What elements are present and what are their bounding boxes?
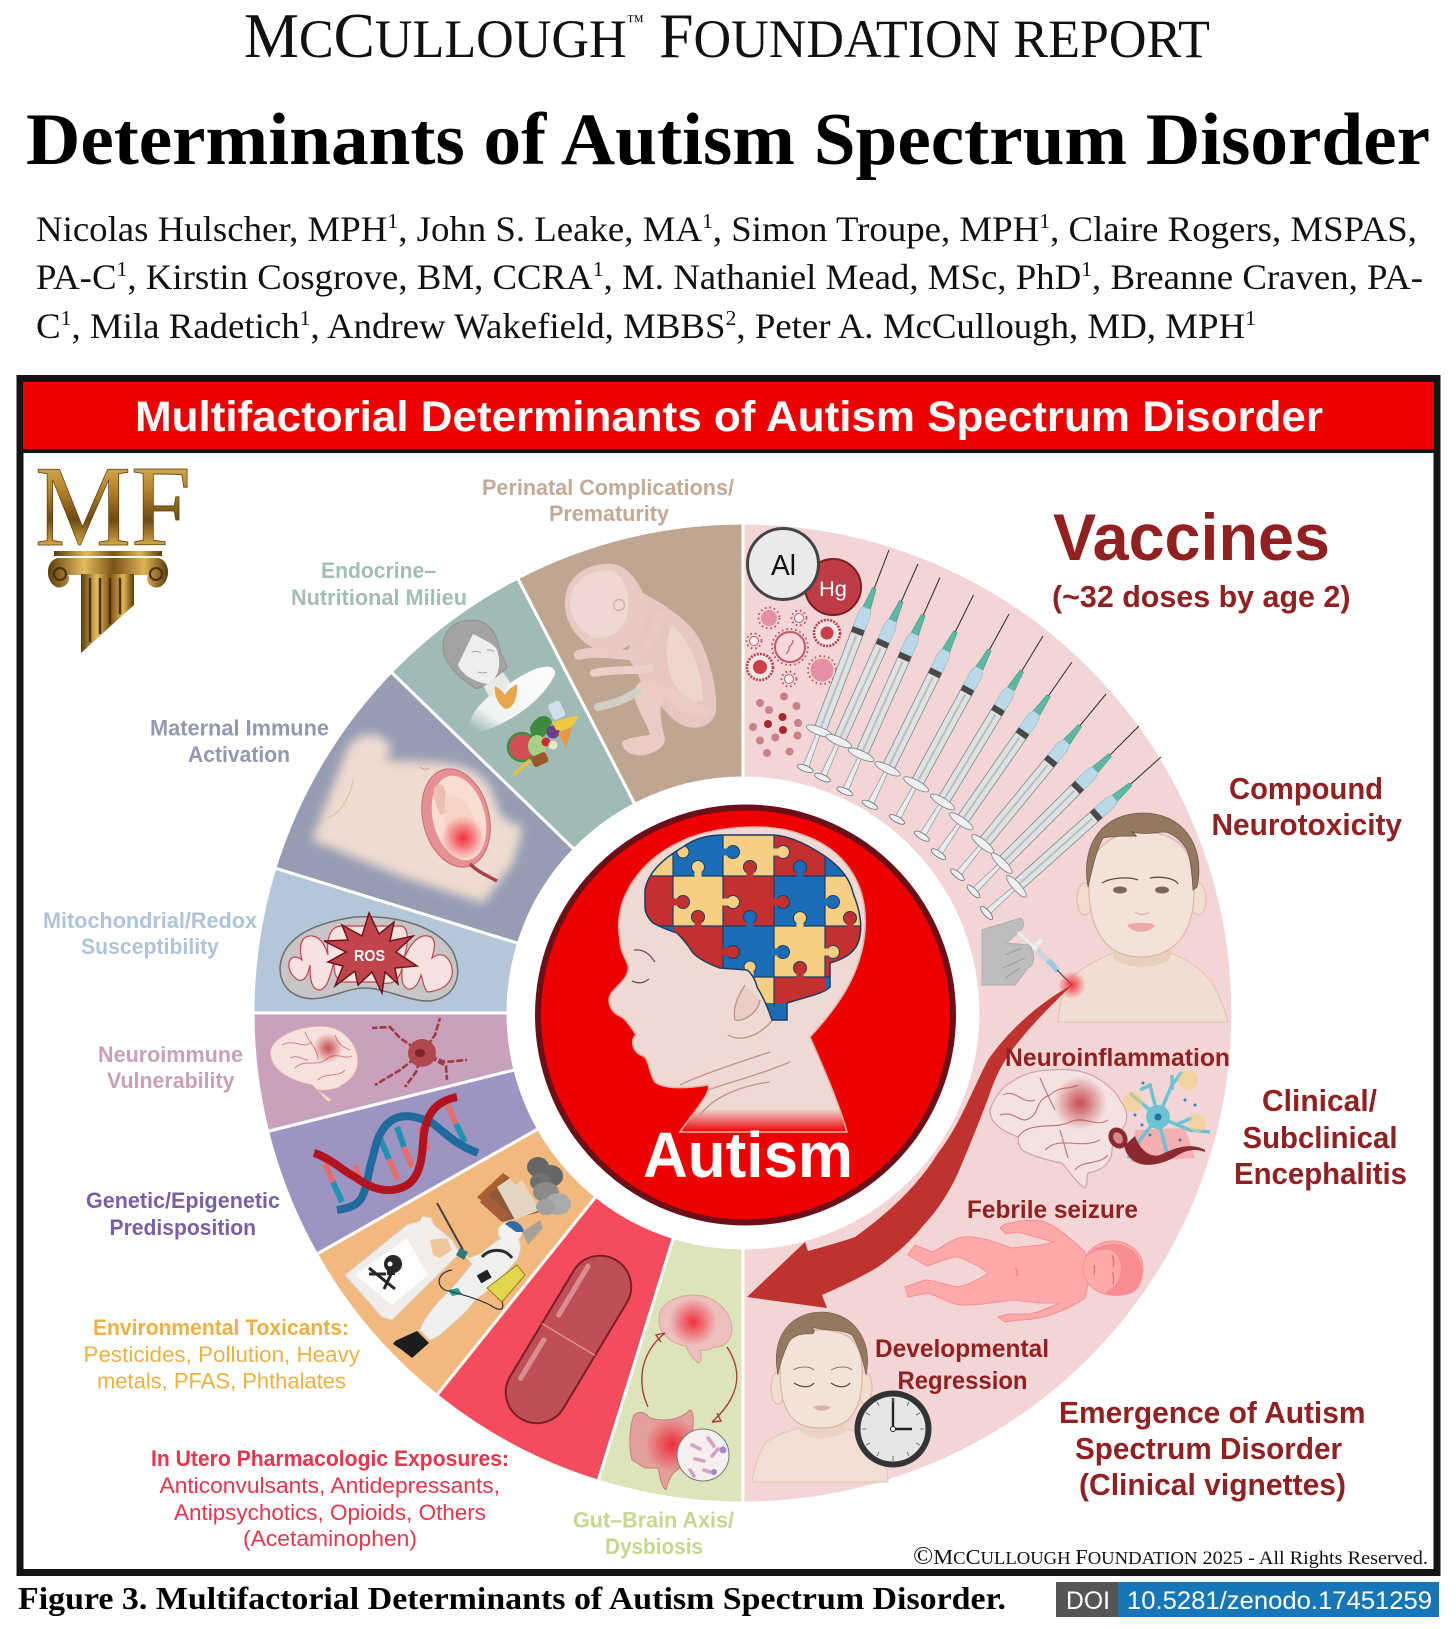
wheel of determinants	[253, 523, 1233, 1503]
heading: vaccines	[1052, 500, 1350, 614]
authors: , Breanne Craven, PA-	[1092, 257, 1423, 297]
illustration: capsule	[494, 1244, 643, 1435]
DOI badge: 10.5281/zenodo.17451259	[1127, 1587, 1432, 1615]
label: environmental toxicants: Environmental Toxicants:	[93, 1315, 349, 1340]
wedge: endocrine nutritional	[391, 578, 635, 850]
face details	[632, 950, 790, 1115]
banner heading: Multifactorial Determinants of Autism Spectrum Disorder	[135, 393, 1323, 441]
wedge: maternal immune activation	[275, 672, 574, 944]
authors: , M. Nathaniel Mead, MSc, PhD	[604, 257, 1081, 297]
illustration: febrile infant	[905, 1220, 1143, 1322]
label: emergence of autism: Emergence of Autism	[1059, 1395, 1366, 1430]
jug	[345, 1216, 460, 1320]
banner	[23, 382, 1434, 453]
label: maternal immune activation: Maternal Immune	[150, 716, 329, 740]
panel: figure frame	[20, 378, 1437, 1572]
icon: aluminium: Al	[771, 550, 796, 582]
header: McCullough Foundation Report: MCCULLOUGH	[244, 0, 636, 71]
label: developmental regression	[875, 1335, 1049, 1395]
icon: mercury	[805, 559, 861, 615]
header: McCullough Foundation Report: OUNDATION REPORT	[693, 9, 1229, 69]
DOI badge: DOI	[1066, 1587, 1110, 1615]
blood vessel	[1124, 1136, 1205, 1165]
label: clinical subclinical encephalitis: Subclinical	[1242, 1120, 1398, 1155]
label: perinatal complications	[482, 475, 734, 526]
heading: vaccines: Vaccines	[1053, 500, 1330, 574]
label: clinical subclinical encephalitis	[1234, 1083, 1407, 1191]
illustration: toxicants, sprayer and factory	[345, 1157, 571, 1358]
copyright: ©MCCULLOUGH FOUNDATION 2025 - All Rights Reserved.	[913, 1543, 1428, 1570]
backpack and hose	[482, 1250, 512, 1258]
authors: , Andrew Wakefield, MBBS	[311, 306, 726, 346]
skull and crossbones	[369, 1255, 402, 1289]
baby head silhouette	[609, 827, 865, 1132]
illustration: DNA helix	[314, 1097, 478, 1210]
label: mitochondrial redox susceptibility	[43, 908, 258, 959]
icon: clock	[858, 1394, 928, 1464]
label: genetic epigenetic predisposition	[86, 1188, 280, 1240]
label: genetic epigenetic predisposition: Genetic/Epigenetic	[86, 1188, 280, 1213]
wedge: environmental toxicants	[316, 1129, 596, 1395]
label: developmental regression: Developmental	[875, 1335, 1049, 1363]
wedge: mitochondrial redox	[253, 868, 518, 1013]
illustration: neuroinflammation brain and neuron	[990, 1070, 1210, 1188]
authors	[36, 209, 1423, 346]
label: compound neurotoxicity: Neurotoxicity	[1212, 807, 1403, 842]
header: McCullough Foundation Report: ™	[627, 11, 644, 31]
label: endocrine nutritional milieu	[291, 558, 467, 610]
illustration: woman with thyroid and food	[443, 620, 578, 775]
authors: 1	[61, 306, 71, 330]
wedge: vaccines	[743, 523, 1233, 1503]
label: in utero pharmacologic exposures: In Utero Pharmacologic Exposures:	[151, 1446, 509, 1471]
label: compound neurotoxicity	[1212, 771, 1403, 842]
spray wand	[437, 1203, 463, 1250]
puzzle knobs	[676, 846, 856, 974]
smoke	[527, 1157, 571, 1215]
illustration: gut-brain axis	[630, 1295, 737, 1490]
label: emergence of autism: Spectrum Disorder	[1075, 1431, 1342, 1466]
authors: , Claire Rogers, MSPAS,	[1050, 209, 1417, 249]
label: gut-brain axis dysbiosis: Dysbiosis	[605, 1534, 703, 1559]
logo: MF column: MF	[35, 443, 191, 571]
authors: 1	[1039, 209, 1050, 233]
label: environmental toxicants: Pesticides, Pollution, Heavy	[84, 1342, 360, 1367]
authors: 1	[300, 306, 311, 330]
icon: mercury: Hg	[819, 578, 847, 601]
authors: , John S. Leake, MA	[398, 209, 702, 249]
label: gut-brain axis dysbiosis	[573, 1508, 734, 1559]
label: endocrine nutritional milieu: Endocrine–	[321, 558, 436, 583]
wedge: perinatal complications	[518, 523, 743, 804]
food group	[508, 700, 578, 775]
illustration: gloved hand with syringe	[982, 918, 1086, 999]
worker suit	[420, 1235, 520, 1340]
label: neuroimmune vulnerability	[98, 1042, 243, 1093]
illustration: fetus	[565, 564, 716, 755]
illustration: mitochondrion with ROS	[280, 913, 458, 1001]
arrow: from injection to autism	[747, 985, 1072, 1308]
label: in utero pharmacologic exposures: Antipsychotics, Opioids, Others	[174, 1500, 486, 1525]
neuron	[1123, 1070, 1210, 1162]
illustration: pregnant abdomen	[312, 735, 523, 903]
authors: , Peter A. McCullough, MD, MPH	[736, 306, 1245, 346]
factory	[477, 1173, 510, 1203]
puzzle brain	[646, 836, 860, 1020]
label: compound neurotoxicity: Compound	[1229, 771, 1383, 806]
illustration: sleeping infant	[752, 1312, 888, 1482]
authors: PA-C	[36, 257, 114, 297]
header: McCullough Foundation Report: F	[644, 0, 693, 71]
label: gut-brain axis dysbiosis: Gut–Brain Axis/	[573, 1508, 734, 1532]
label: endocrine nutritional milieu: Nutritional Milieu	[291, 585, 467, 610]
authors: , Kirstin Cosgrove, BM, CCRA	[127, 257, 593, 297]
label: perinatal complications: Prematurity	[549, 501, 670, 526]
label: neuroinflammation: Neuroinflammation	[1005, 1044, 1230, 1072]
figure caption: Figure 3. Multifactorial Determinants of Autism Spectrum Disorder.	[18, 1580, 1006, 1616]
label: maternal immune activation: Activation	[188, 742, 290, 767]
logo: MF column	[35, 443, 191, 653]
authors: , Simon Troupe, MPH	[713, 209, 1039, 249]
label: clinical subclinical encephalitis: Encephalitis	[1234, 1156, 1407, 1191]
authors: , Mila Radetich	[71, 306, 300, 346]
authors: 1	[702, 209, 713, 233]
label: in utero pharmacologic exposures	[151, 1446, 509, 1551]
label: mitochondrial redox susceptibility: Susceptibility	[81, 934, 220, 959]
ROS burst	[324, 913, 417, 993]
illustration: inflamed brain and microglia	[270, 1018, 467, 1102]
wedge: neuroimmune	[253, 1013, 515, 1132]
syringes	[791, 545, 1170, 925]
title: Determinants of Autism Spectrum Disorder	[26, 99, 1430, 181]
illustration: smiling infant	[1058, 813, 1228, 1022]
illustration: viruses and particles	[746, 608, 840, 757]
label: emergence of autism	[1059, 1395, 1366, 1502]
label: genetic epigenetic predisposition: Predisposition	[110, 1215, 256, 1240]
label: maternal immune activation	[150, 716, 329, 767]
label: neuroimmune vulnerability: Neuroimmune	[98, 1042, 243, 1067]
label: in utero pharmacologic exposures: Anticonvulsants, Antidepressants,	[160, 1473, 500, 1498]
heading: vaccines: (~32 doses by age 2)	[1052, 579, 1350, 614]
authors: 1	[593, 257, 604, 281]
authors: Nicolas Hulscher, MPH	[36, 209, 375, 249]
authors: 1	[387, 209, 398, 233]
illustration: mitochondrion with ROS: ROS	[354, 948, 385, 965]
label: emergence of autism: (Clinical vignettes)	[1079, 1467, 1346, 1502]
label: environmental toxicants: metals, PFAS, Phthalates	[97, 1368, 346, 1394]
wedge: genetic	[268, 1070, 538, 1254]
authors: C	[36, 306, 60, 346]
authors: 2	[726, 306, 736, 330]
wedge: pharmacologic exposures	[437, 1196, 674, 1481]
label: perinatal complications: Perinatal Complications/	[482, 475, 734, 500]
label: in utero pharmacologic exposures: (Acetaminophen)	[243, 1526, 417, 1551]
knob necks	[671, 848, 854, 978]
authors: 1	[117, 257, 127, 281]
center medallion	[538, 808, 953, 1222]
authors: 1	[1245, 306, 1256, 330]
icon: aluminium	[748, 528, 818, 600]
wedge: gut-brain axis	[598, 1238, 743, 1503]
label: developmental regression: Regression	[898, 1367, 1028, 1395]
label: clinical subclinical encephalitis: Clinical/	[1262, 1083, 1377, 1118]
DOI badge	[1056, 1582, 1439, 1617]
label: febrile seizure: Febrile seizure	[967, 1196, 1138, 1224]
label: neuroimmune vulnerability: Vulnerability	[107, 1068, 235, 1093]
center label: Autism	[643, 1119, 853, 1191]
authors: 1	[1081, 257, 1092, 281]
label: mitochondrial redox susceptibility: Mitochondrial/Redox	[43, 908, 258, 933]
axis arrows	[642, 1333, 737, 1422]
label: environmental toxicants	[84, 1315, 360, 1394]
